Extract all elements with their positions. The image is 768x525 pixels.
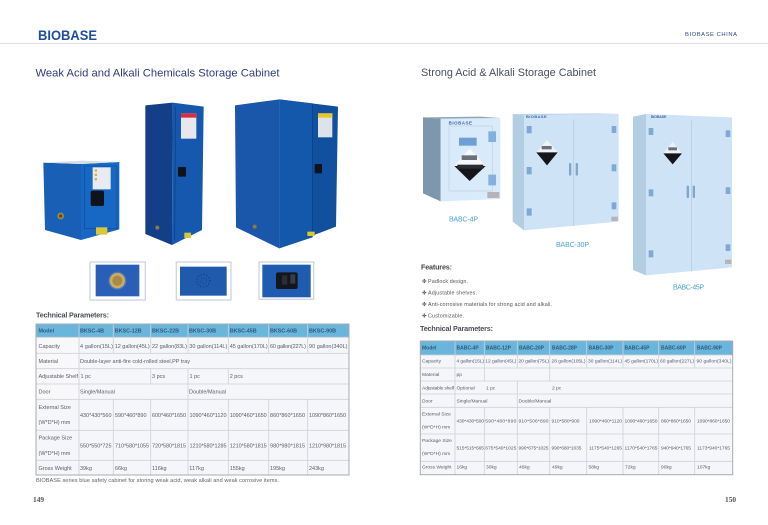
heading: technical parameters right: Technical Parameters: bbox=[420, 324, 493, 333]
table header row: BABC-60P bbox=[661, 346, 687, 352]
table body rows: 90kg bbox=[661, 465, 672, 471]
table body rows: 430*430*560 bbox=[80, 413, 112, 419]
table body rows: 45 gallon(170L) bbox=[624, 359, 658, 365]
features list bbox=[421, 262, 552, 319]
table body rows: (W*D*H) mm bbox=[422, 425, 450, 431]
table body rows: Gross Weight bbox=[38, 466, 72, 472]
model label BABC-4P: BABC-4P bbox=[449, 216, 478, 224]
table body rows: 66kg bbox=[115, 466, 127, 472]
table body rows: 1 pc bbox=[190, 374, 200, 380]
table body rows: 72kg bbox=[625, 465, 636, 471]
table header row: BABC-45P bbox=[624, 346, 650, 352]
table header row: BKSC-30B bbox=[189, 329, 216, 335]
table body rows: Material bbox=[422, 372, 439, 378]
table header row: BABC-12P bbox=[486, 346, 512, 352]
features list: ✤ bbox=[422, 291, 427, 297]
table body rows: 1090*460*1120 bbox=[190, 413, 226, 419]
table header row bbox=[38, 329, 336, 335]
PP cabinet BABC-45P bbox=[633, 114, 732, 275]
table body rows: Door bbox=[38, 390, 51, 396]
brand region label: BIOBASE CHINA bbox=[685, 32, 737, 38]
table body rows: 515*515*665 bbox=[456, 446, 484, 452]
features list: Customizable. bbox=[428, 313, 464, 319]
table body rows: 860*860*1650 bbox=[661, 419, 691, 425]
table body rows: 430*430*500 bbox=[456, 419, 484, 425]
table body rows: Capacity bbox=[422, 359, 442, 365]
table body rows: 1 pc bbox=[486, 385, 496, 391]
table body rows: 1090*860*1650 bbox=[697, 419, 730, 425]
model label BABC-30P: BABC-30P bbox=[556, 242, 589, 249]
table body rows: 116kg bbox=[152, 466, 167, 472]
table body rows: 2 pc bbox=[552, 385, 562, 391]
table body rows: 22 gallon(83L) bbox=[152, 344, 187, 350]
table body rows: 60 gallon(227L) bbox=[270, 344, 306, 350]
table body rows: 30 gallon(114L) bbox=[588, 359, 622, 365]
table body rows: Package Size bbox=[38, 436, 72, 442]
page number 149: 149 bbox=[33, 495, 44, 504]
table body rows: 910*580*900 bbox=[552, 419, 580, 425]
table body rows: Single/Manual bbox=[80, 390, 115, 396]
table body rows bbox=[422, 359, 732, 471]
table: weak acid cabinets bbox=[36, 324, 349, 475]
table body rows: 980*980*1815 bbox=[270, 444, 305, 450]
table body rows: Double/Manual bbox=[189, 390, 226, 396]
features list: ✤ bbox=[422, 279, 427, 285]
table body rows: 46kg bbox=[519, 465, 530, 471]
table body rows: (W*D*H) mm bbox=[422, 451, 450, 457]
table body rows: 1175*540*1265 bbox=[589, 446, 622, 452]
page number 150: 150 bbox=[725, 495, 736, 504]
table body rows: 1090*460*1650 bbox=[624, 419, 658, 425]
table header row: BKSC-60B bbox=[270, 329, 297, 335]
table body rows: 3 pcs bbox=[152, 374, 165, 380]
table body rows: External Size bbox=[38, 405, 71, 411]
table body rows: 1210*580*1285 bbox=[190, 444, 226, 450]
PP cabinet BABC-30P bbox=[513, 113, 619, 230]
features list: Features: bbox=[421, 262, 452, 272]
table body rows bbox=[38, 344, 348, 472]
detail photo: lock bbox=[259, 262, 314, 299]
table body rows: 117kg bbox=[189, 466, 204, 472]
table body rows: 1210*580*1815 bbox=[230, 444, 267, 450]
table body rows: 155kg bbox=[230, 466, 245, 472]
table header row: BABC-30P bbox=[588, 346, 614, 352]
table body rows: 990*680*1035 bbox=[552, 446, 582, 452]
table body rows: 30 gallon(114L) bbox=[189, 344, 227, 350]
table body rows: Adjustable Shelf bbox=[38, 374, 78, 380]
table header row: BKSC-90B bbox=[309, 329, 336, 335]
detail photo: grounding port bbox=[90, 262, 145, 300]
table body rows: 39kg bbox=[80, 466, 92, 472]
table body rows: 4 gallon(15L) bbox=[80, 344, 113, 350]
table body rows: 2 pcs bbox=[230, 374, 243, 380]
table body rows: 1170*540*1765 bbox=[624, 446, 658, 452]
table header row: BABC-90P bbox=[697, 346, 723, 352]
table body rows: 720*580*1815 bbox=[152, 444, 186, 450]
table body rows: 1090*460*1650 bbox=[230, 413, 267, 419]
table header row: BKSC-12B bbox=[115, 329, 142, 335]
table body rows: 195kg bbox=[270, 466, 285, 472]
table header row: BKSC-45B bbox=[230, 329, 257, 335]
PP cabinet BABC-4P bbox=[423, 117, 500, 201]
table header row: BABC-28P bbox=[552, 346, 578, 352]
table body rows: Single/Manual bbox=[456, 398, 488, 404]
table body rows: 590*480*890 bbox=[485, 419, 517, 425]
table body rows: 243kg bbox=[309, 466, 324, 472]
table body rows: 550*550*725 bbox=[80, 444, 112, 450]
tall blue cabinet BKSC-22B bbox=[145, 103, 204, 245]
table body rows: 1173*940*1765 bbox=[697, 446, 730, 452]
blue cabinets and detail photos bbox=[43, 99, 338, 300]
table header row bbox=[422, 346, 723, 352]
table body rows: 910*506*890 bbox=[518, 419, 549, 425]
table body rows: 1090*860*1650 bbox=[309, 413, 346, 419]
table body rows: 1 pc bbox=[80, 374, 91, 380]
table body rows: External Size bbox=[422, 412, 451, 418]
detail photo: vent bbox=[176, 262, 231, 300]
small blue cabinet BKSC-4B bbox=[43, 161, 119, 240]
PP cabinet BABC-45P: BIOBASE bbox=[651, 115, 667, 119]
table body rows: Material bbox=[38, 359, 58, 365]
table header row: BKSC-4B bbox=[80, 329, 104, 335]
table caption: BIOBASE series blue safety cabinet for storing weak acid, weak alkali and weak corrosive items. bbox=[36, 478, 279, 484]
table body rows: 58kg bbox=[588, 465, 599, 471]
table header row: BKSC-22B bbox=[152, 329, 179, 335]
features list: ✤ bbox=[422, 302, 427, 308]
table body rows: 107kg bbox=[697, 465, 711, 471]
features list: Anti-corrosive materials for strong acid and alkali. bbox=[428, 302, 552, 308]
table header row: Model bbox=[422, 346, 437, 352]
table body rows: 16kg bbox=[456, 465, 467, 471]
table body rows: 710*580*1055 bbox=[115, 444, 149, 450]
heading: technical parameters left: Technical Parameters: bbox=[36, 310, 109, 320]
table header row: BABC-20P bbox=[519, 346, 545, 352]
table body rows: Capacity bbox=[38, 344, 60, 350]
table body rows: (W*D*H) mm bbox=[38, 420, 71, 426]
table body rows: (W*D*H) mm bbox=[38, 451, 71, 457]
table body rows: 590*460*890 bbox=[115, 413, 146, 419]
features list: ✤ bbox=[422, 313, 427, 319]
table body rows: Double-layer anti-fire cold-rolled steel,PP tray bbox=[80, 359, 190, 365]
heading: weak acid cabinet: Weak Acid and Alkali Chemicals Storage Cabinet bbox=[36, 68, 280, 80]
table body rows: 940*940*1765 bbox=[661, 446, 691, 452]
table body rows: 49kg bbox=[552, 465, 563, 471]
table body rows: 90 gallon(340L) bbox=[309, 344, 348, 350]
brand logo: BIOBASE bbox=[38, 28, 97, 43]
table body rows: Gross Weight bbox=[422, 465, 452, 471]
table body rows: 990*675*1025 bbox=[518, 446, 549, 452]
table body rows: 675*540*1025 bbox=[485, 446, 517, 452]
table: strong acid cabinets bbox=[420, 341, 733, 475]
table body rows: 28 gallon(105L) bbox=[552, 359, 586, 365]
features list: Adjustable shelves. bbox=[428, 291, 477, 297]
table body rows: 20 gallon(75L) bbox=[518, 359, 549, 365]
table body rows: Adjustable shelf bbox=[422, 385, 455, 391]
table body rows: 860*860*1650 bbox=[270, 413, 305, 419]
pale PP cabinets bbox=[423, 113, 732, 275]
table body rows: 12 gallon(45L) bbox=[115, 344, 150, 350]
table body rows: 1090*460*1120 bbox=[589, 419, 622, 425]
PP cabinet BABC-30P: BIOBASE bbox=[526, 114, 547, 119]
PP cabinet BABC-4P: BIOBASE bbox=[449, 121, 472, 126]
large blue cabinet BKSC-45B bbox=[235, 99, 338, 248]
table header row: Model bbox=[38, 329, 55, 335]
table body rows: Optional bbox=[456, 385, 475, 391]
table body rows: 12 gallon(45L) bbox=[485, 359, 517, 365]
table body rows: Double/Manual bbox=[518, 398, 551, 404]
table body rows: 4 gallon(15L) bbox=[456, 359, 484, 365]
table body rows: 45 gallon(170L) bbox=[230, 344, 268, 350]
features list: Padlock design. bbox=[428, 279, 468, 285]
heading: strong acid cabinet: Strong Acid & Alkali Storage Cabinet bbox=[421, 67, 596, 79]
table body rows: pp bbox=[456, 373, 462, 378]
table body rows: 30kg bbox=[486, 465, 497, 471]
table body rows: 60 gallon(227L) bbox=[660, 359, 694, 365]
model label BABC-45P: BABC-45P bbox=[673, 284, 704, 292]
table body rows: 90 gallon(340L) bbox=[696, 359, 732, 365]
table body rows: 600*460*1650 bbox=[152, 413, 186, 419]
table header row: BABC-4P bbox=[456, 346, 479, 352]
table body rows: 1210*980*1815 bbox=[309, 444, 346, 450]
table body rows: Door bbox=[422, 398, 433, 404]
table body rows: Package Size bbox=[422, 438, 452, 444]
